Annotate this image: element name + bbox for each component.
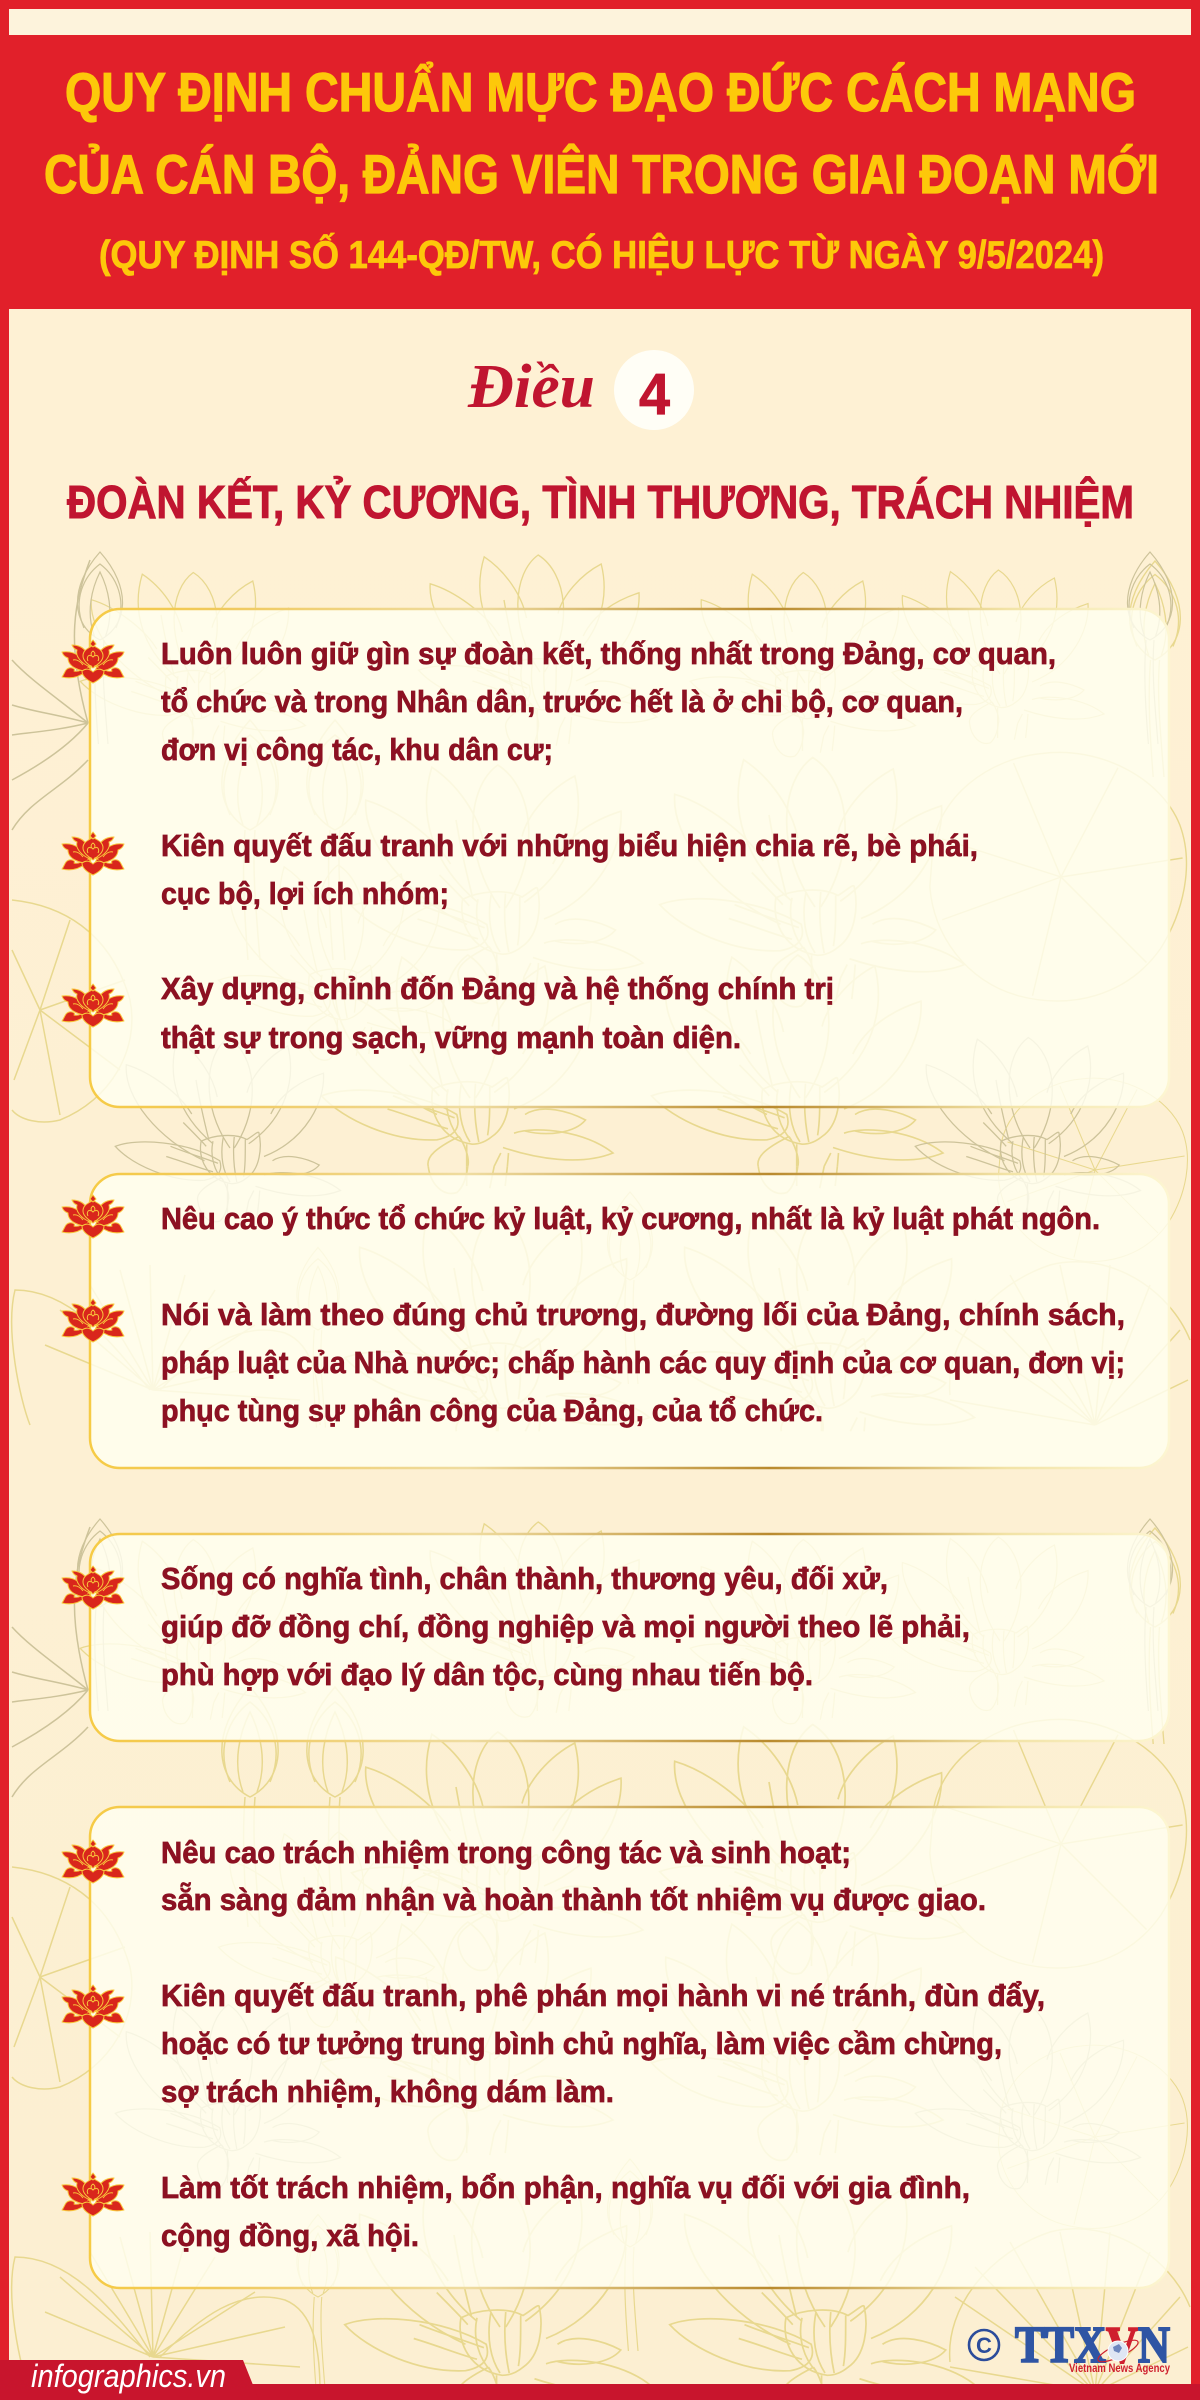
text: item 8: hoặc có tư tưởng trung bình chủ nghĩa, làm việc cầm chừng, bbox=[161, 2027, 1002, 2061]
logo: TTXVN bbox=[969, 2317, 1170, 2375]
text: item 8: sợ trách nhiệm, không dám làm. bbox=[161, 2075, 614, 2109]
copyright mark: C bbox=[976, 2333, 992, 2358]
text: item 1: tổ chức và trong Nhân dân, trước hết là ở chi bộ, cơ quan, bbox=[161, 685, 963, 719]
icon: lotus 9 bbox=[62, 2173, 124, 2216]
text: item 2: Kiên quyết đấu tranh với những biểu hiện chia rẽ, bè phái, bbox=[161, 829, 978, 863]
wordmark: TTXVN bbox=[1015, 2317, 1170, 2374]
icon: lotus 6 bbox=[62, 1566, 124, 1609]
text: item 8 bbox=[161, 1979, 1045, 2109]
number badge: 4 bbox=[639, 362, 670, 427]
text: item 1 bbox=[161, 637, 1056, 767]
text: item 5 bbox=[161, 1298, 1125, 1428]
panel: trách nhiệm bbox=[62, 1807, 1169, 2288]
copyright mark bbox=[969, 2330, 999, 2360]
panel: kỷ cương bbox=[62, 1174, 1169, 1468]
subtitle: (QUY ĐỊNH SỐ 144-QĐ/TW, CÓ HIỆU LỰC TỪ NGÀY 9/5/2024) bbox=[99, 232, 1104, 277]
text: item 7: sẵn sàng đảm nhận và hoàn thành tốt nhiệm vụ được giao. bbox=[161, 1881, 986, 1917]
panel: đoàn kết bbox=[62, 609, 1169, 1107]
icon: lotus 1 bbox=[62, 640, 124, 683]
footer source tag: infographics.vn bbox=[31, 2358, 226, 2394]
word Điều: Điều bbox=[467, 353, 595, 421]
text: item 6: phù hợp với đạo lý dân tộc, cùng nhau tiến bộ. bbox=[161, 1658, 813, 1692]
text: item 7 bbox=[161, 1836, 986, 1917]
number badge bbox=[614, 350, 694, 430]
icon: lotus 8 bbox=[62, 1985, 124, 2028]
icon: lotus 3 bbox=[62, 984, 124, 1027]
text: item 3: thật sự trong sạch, vững mạnh toàn diện. bbox=[161, 1021, 741, 1055]
text: item 9: cộng đồng, xã hội. bbox=[161, 2219, 419, 2253]
text: item 2: cục bộ, lợi ích nhóm; bbox=[161, 877, 449, 911]
icon: lotus 4 bbox=[62, 1195, 124, 1238]
text: item 5: Nói và làm theo đúng chủ trương, đường lối của Đảng, chính sách, bbox=[161, 1298, 1125, 1332]
text: item 9: Làm tốt trách nhiệm, bổn phận, nghĩa vụ đối với gia đình, bbox=[161, 2171, 970, 2205]
text: item 2 bbox=[161, 829, 978, 911]
text: item 9 bbox=[161, 2171, 970, 2253]
bottom red strip bbox=[0, 2384, 1200, 2400]
text: item 1: Luôn luôn giữ gìn sự đoàn kết, thống nhất trong Đảng, cơ quan, bbox=[161, 637, 1056, 671]
text: item 4: Nêu cao ý thức tổ chức kỷ luật, kỷ cương, nhất là kỷ luật phát ngôn. bbox=[161, 1202, 1100, 1236]
icon: lotus 5 bbox=[62, 1299, 124, 1342]
icon: lotus 2 bbox=[62, 832, 124, 875]
text: item 5: phục tùng sự phân công của Đảng, của tổ chức. bbox=[161, 1394, 823, 1428]
text: item 1: đơn vị công tác, khu dân cư; bbox=[161, 733, 553, 767]
text: item 6: Sống có nghĩa tình, chân thành, thương yêu, đối xử, bbox=[161, 1562, 888, 1596]
top cream band bbox=[9, 9, 1191, 35]
text: item 6: giúp đỡ đồng chí, đồng nghiệp và mọi người theo lẽ phải, bbox=[161, 1610, 970, 1644]
header titles bbox=[44, 62, 1159, 277]
article label: Điều 4 bbox=[467, 350, 694, 430]
text: item 6 bbox=[161, 1562, 970, 1692]
text: item 3 bbox=[161, 972, 834, 1055]
panel: tình thương bbox=[62, 1534, 1169, 1741]
text: item 7: Nêu cao trách nhiệm trong công tác và sinh hoạt; bbox=[161, 1836, 851, 1870]
text: item 8: Kiên quyết đấu tranh, phê phán mọi hành vi né tránh, đùn đẩy, bbox=[161, 1979, 1045, 2013]
lotus line-art background, lower tile bbox=[12, 1519, 1190, 2398]
icon: lotus 7 bbox=[62, 1840, 124, 1883]
text: item 5: pháp luật của Nhà nước; chấp hành các quy định của cơ quan, đơn vị; bbox=[161, 1346, 1125, 1380]
agency name: Vietnam News Agency bbox=[1069, 2363, 1170, 2375]
globe bbox=[1096, 2336, 1140, 2366]
text: item 3: Xây dựng, chỉnh đốn Đảng và hệ thống chính trị bbox=[161, 972, 834, 1006]
lotus line-art background, upper tile bbox=[12, 552, 1190, 1431]
